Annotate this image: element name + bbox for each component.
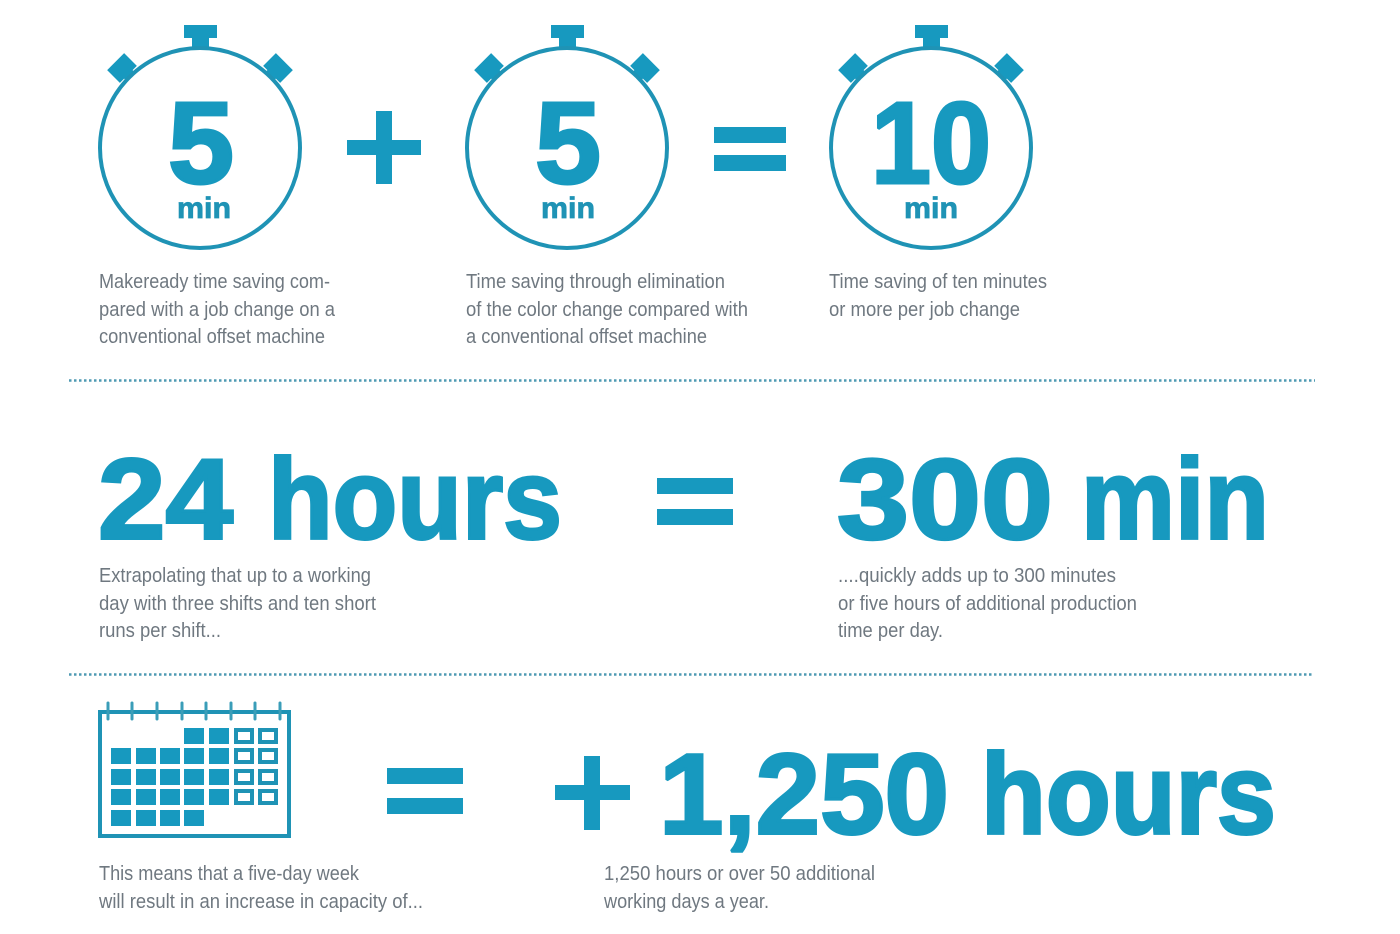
equals sign xyxy=(657,478,733,525)
stopwatch: 10 min xyxy=(831,25,1031,248)
caption: extrapolating: Extrapolating that up to a working xyxy=(99,565,371,587)
headline: 300 min: 300 xyxy=(837,436,1053,564)
caption: ten minutes saving: Time saving of ten minutes xyxy=(829,271,1047,293)
caption: 300 minutes: ....quickly adds up to 300 minutes xyxy=(838,565,1116,587)
headline: +1,250 hours xyxy=(555,732,1276,858)
headline: 300 min: min xyxy=(1081,436,1269,564)
caption: 300 minutes: or five hours of additional production xyxy=(838,593,1137,615)
caption: makeready time saving: pared with a job change on a xyxy=(99,299,336,321)
caption: extrapolating: runs per shift... xyxy=(99,620,221,642)
stopwatch: second 5 min xyxy=(467,25,667,248)
caption: color change saving: Time saving through elimination xyxy=(466,271,725,293)
headline: +1,250 hours: hours xyxy=(981,732,1276,858)
stopwatch: second 5 min: 5 xyxy=(535,78,601,208)
caption: five-day week: This means that a five-day week xyxy=(99,863,360,885)
equals sign xyxy=(714,127,786,171)
caption: ten minutes saving: or more per job change xyxy=(829,299,1020,321)
stopwatch: 10 min: 10 xyxy=(871,78,991,208)
equals sign xyxy=(387,768,463,814)
stopwatch: 5 min xyxy=(100,25,300,248)
stopwatch: 5 min: 5 xyxy=(168,78,234,208)
headline: 24 hours: 24 xyxy=(98,436,233,564)
stopwatch: 5 min: min xyxy=(177,192,231,225)
caption: makeready time saving: Makeready time saving com- xyxy=(99,271,330,293)
headline: 24 hours: hours xyxy=(268,436,562,564)
stopwatch: 10 min: min xyxy=(904,192,958,225)
caption: makeready time saving: conventional offset machine xyxy=(99,326,325,348)
caption: 1,250 hours: 1,250 hours or over 50 additional xyxy=(604,863,875,885)
caption: color change saving: a conventional offset machine xyxy=(466,326,707,348)
stopwatch: second 5 min: min xyxy=(541,192,595,225)
caption: extrapolating: day with three shifts and ten short xyxy=(99,593,376,615)
caption: 300 minutes: time per day. xyxy=(838,620,943,642)
caption: 1,250 hours: working days a year. xyxy=(603,891,769,913)
caption: five-day week: will result in an increase in capacity of... xyxy=(98,891,423,913)
caption: color change saving: of the color change compared with xyxy=(466,299,748,321)
icon: calendar xyxy=(100,703,289,836)
plus sign xyxy=(347,111,421,184)
headline: +1,250 hours: 1,250 xyxy=(659,732,949,858)
